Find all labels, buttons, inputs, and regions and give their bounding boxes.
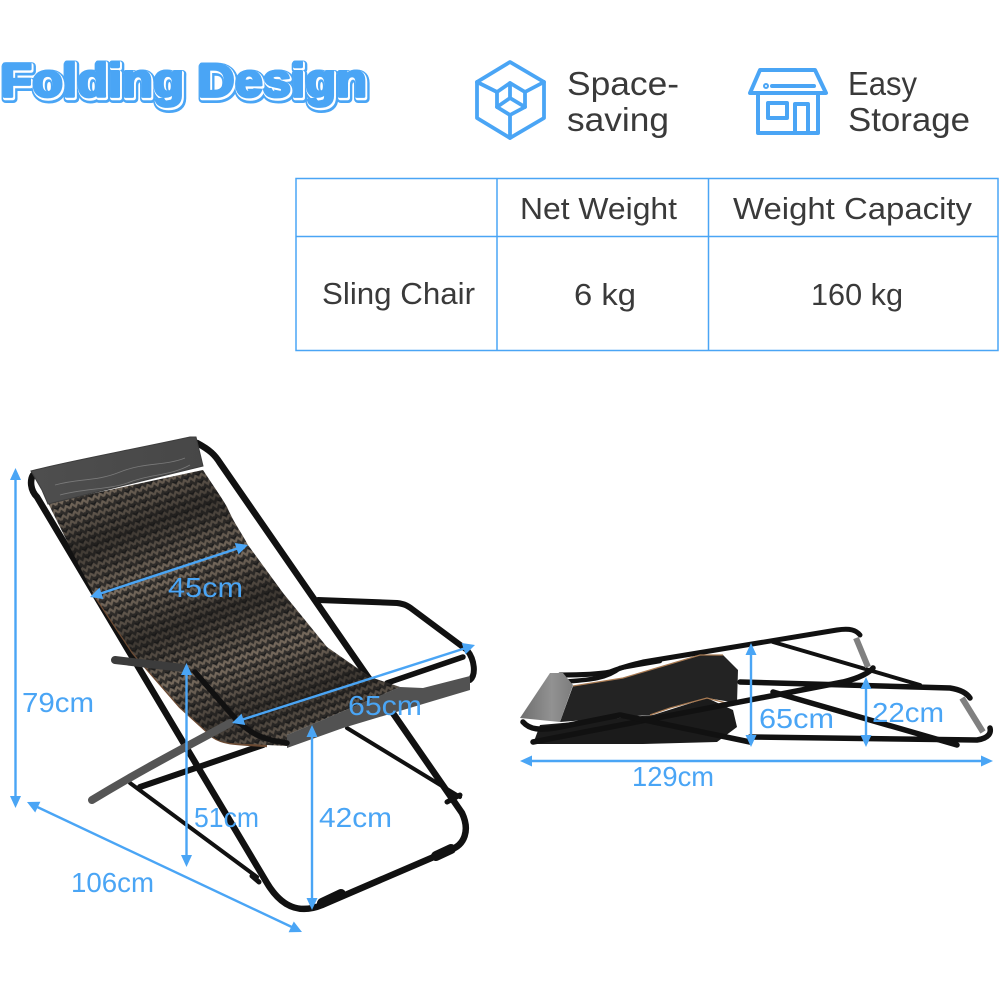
chair folded illustration bbox=[520, 629, 990, 745]
label: space-saving: saving bbox=[567, 101, 669, 138]
dimension: seat height 42cm bbox=[306, 725, 392, 910]
title: Folding Design bbox=[2, 56, 368, 109]
dimension: folded 65cm: 65cm bbox=[759, 703, 834, 734]
table text: Weight Capacity bbox=[733, 191, 973, 226]
label: easy storage: Storage bbox=[848, 101, 970, 138]
dimension: seat width 45cm: 45cm bbox=[168, 572, 243, 603]
icon: storage house bbox=[750, 70, 826, 133]
dimension: seat length 65cm: 65cm bbox=[348, 690, 422, 721]
specification table bbox=[296, 178, 998, 350]
table text: Net Weight bbox=[520, 191, 677, 226]
front fabric strip bbox=[287, 676, 470, 748]
rear frame parts bbox=[31, 443, 474, 909]
dimension: folded length 129cm: 129cm bbox=[632, 761, 714, 792]
dimension: arm height 51cm bbox=[181, 663, 259, 867]
table grid bbox=[296, 178, 998, 350]
seat weave bbox=[48, 470, 400, 746]
dimension: seat height 42cm: 42cm bbox=[319, 802, 392, 833]
dimension: height 79cm: 79cm bbox=[22, 687, 94, 718]
dimension: arm height 51cm: 51cm bbox=[194, 802, 259, 833]
headrest bbox=[31, 437, 203, 504]
dimension: seat length 65cm bbox=[232, 643, 475, 725]
folded frame back bbox=[560, 629, 990, 745]
headrest wave stitching bbox=[55, 458, 190, 495]
table text: 6 kg bbox=[574, 277, 636, 312]
title: Folding Design bbox=[1, 54, 367, 106]
folded lower mesh bbox=[533, 698, 737, 744]
folded frame front bbox=[523, 668, 873, 742]
table text: Sling Chair bbox=[322, 276, 475, 311]
seat weave shading bbox=[48, 470, 400, 746]
folded gray bars bbox=[856, 638, 983, 732]
folded seat brown piping bbox=[573, 655, 730, 715]
dimension: folded 65cm bbox=[746, 643, 834, 747]
label: easy storage: Easy bbox=[848, 65, 917, 102]
dimension: depth 106cm bbox=[27, 802, 302, 932]
grips bbox=[322, 849, 451, 903]
label: space-saving bbox=[567, 65, 679, 138]
title: Folding Design bbox=[2, 55, 368, 108]
folded headrest bbox=[520, 673, 573, 722]
dimension: folded length 129cm bbox=[520, 756, 993, 792]
dimension: depth 106cm: 106cm bbox=[71, 867, 154, 898]
dimension: height 79cm bbox=[10, 468, 94, 808]
icon: cube bbox=[477, 62, 544, 138]
dimension: folded 22cm bbox=[860, 677, 944, 747]
table text bbox=[322, 191, 973, 312]
chair unfolded illustration bbox=[31, 437, 474, 909]
seat brown edge bbox=[93, 593, 267, 746]
label: easy storage bbox=[848, 65, 970, 138]
folded black seat bbox=[560, 655, 738, 722]
front armrest bbox=[92, 660, 287, 800]
table text: 160 kg bbox=[811, 277, 903, 312]
dimension: seat width 45cm bbox=[90, 543, 248, 603]
dimension: folded 22cm: 22cm bbox=[872, 697, 944, 728]
label: space-saving: Space- bbox=[567, 65, 679, 102]
